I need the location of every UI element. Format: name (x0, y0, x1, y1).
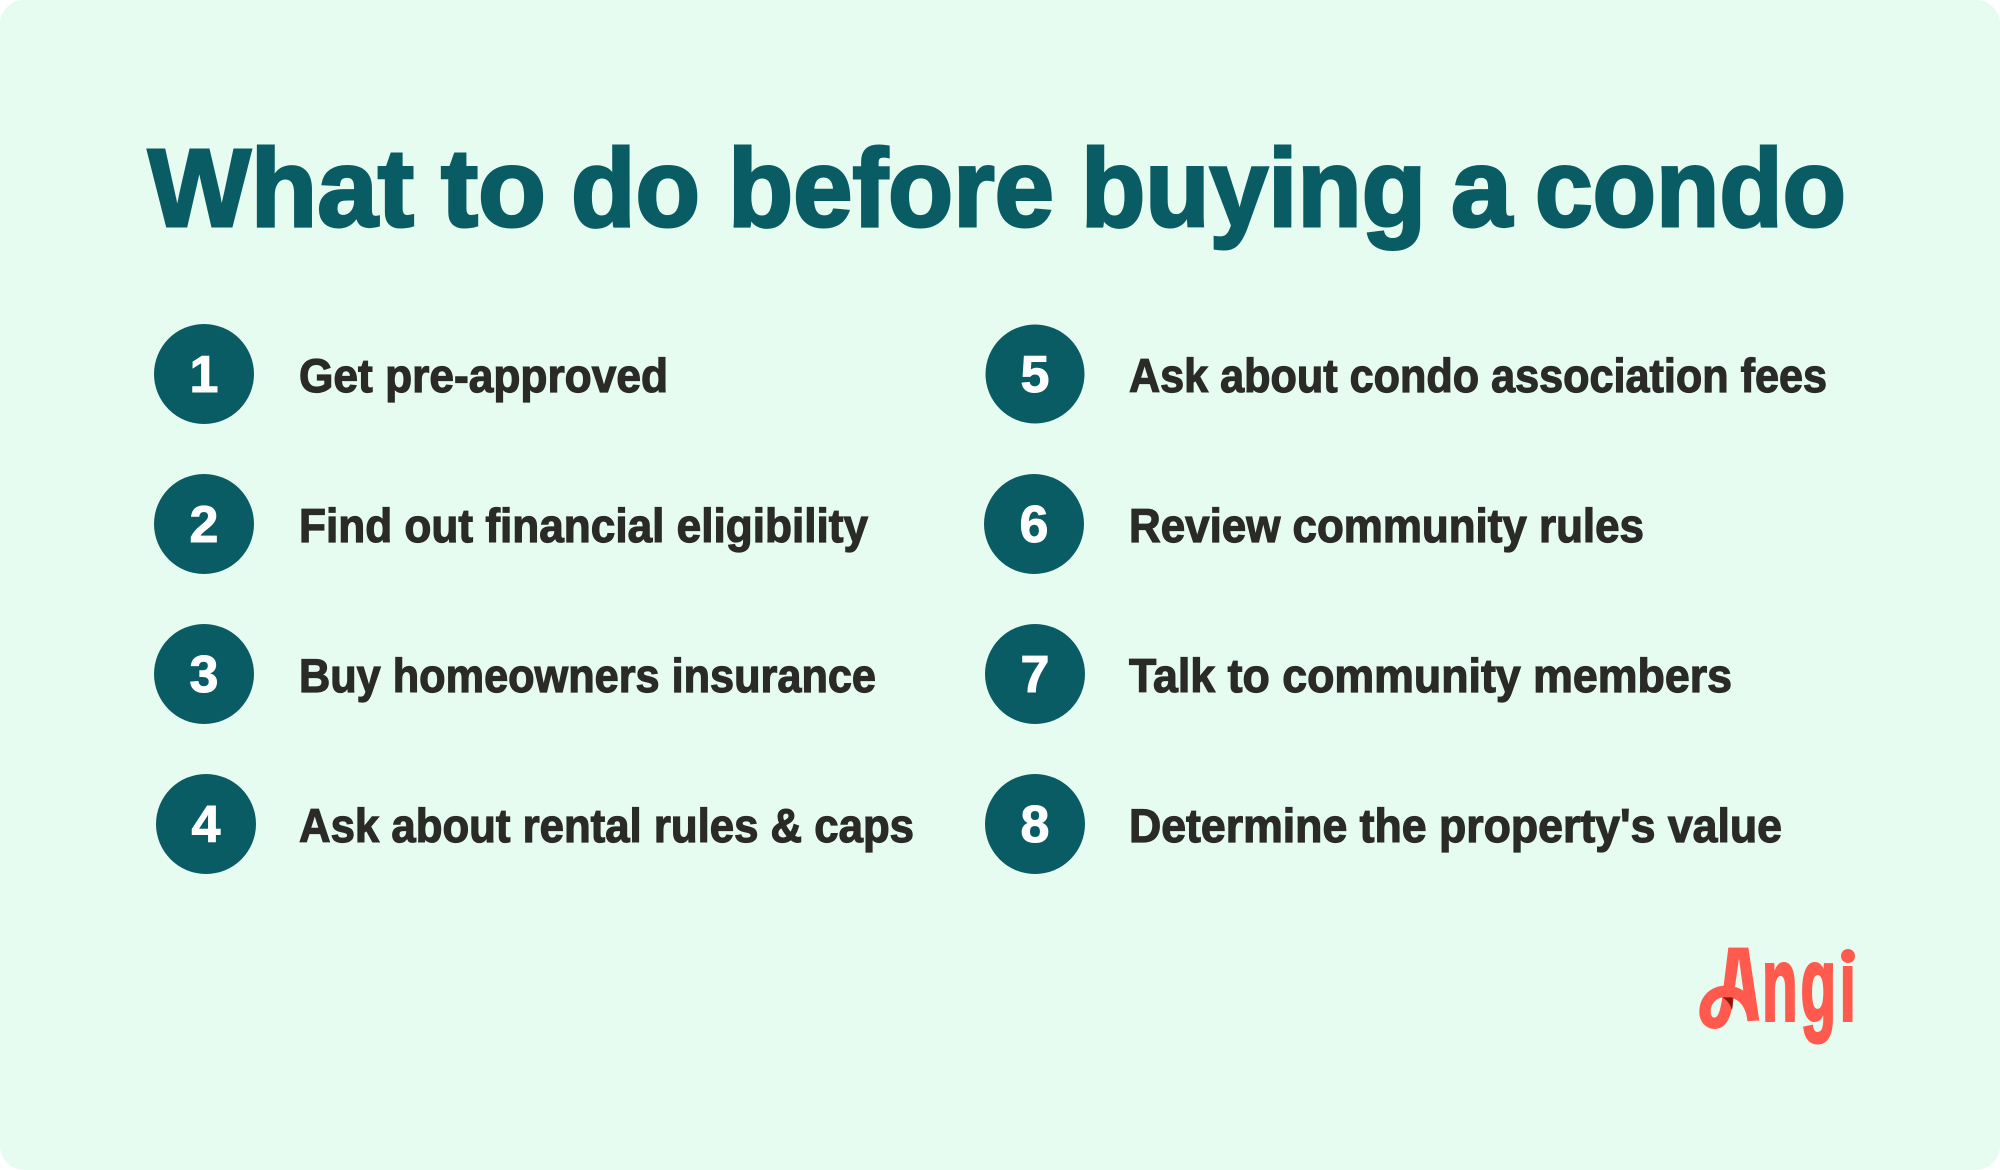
step 4 (156, 774, 914, 874)
step 1: Get pre-approved (299, 349, 668, 402)
title: to (441, 127, 546, 250)
title: condo (1535, 127, 1846, 250)
step 8 (985, 774, 1782, 874)
step 4: 4 (192, 796, 221, 854)
title: before (728, 127, 1054, 250)
step 2: Find out financial eligibility (299, 499, 868, 552)
step 7: Talk to community members (1129, 649, 1732, 702)
step 3 (154, 624, 876, 724)
step 5: 5 (1021, 346, 1049, 404)
title: buying (1081, 127, 1426, 250)
title: What (148, 127, 414, 250)
step 1: 1 (190, 346, 218, 404)
step 2: 2 (190, 496, 218, 554)
step 8: 8 (1021, 796, 1049, 854)
step 4: Ask about rental rules & caps (299, 799, 914, 852)
step 3: 3 (190, 646, 218, 704)
step 8: Determine the property's value (1129, 799, 1782, 852)
step 3: Buy homeowners insurance (299, 649, 876, 702)
step 6: 6 (1020, 496, 1048, 554)
step 5 (986, 324, 1827, 424)
title: a (1451, 127, 1513, 250)
step 2 (154, 474, 868, 574)
step 5: Ask about condo association fees (1129, 349, 1827, 402)
title: do (571, 127, 700, 250)
step 1 (154, 324, 668, 424)
step 6 (984, 474, 1644, 574)
step 7 (985, 624, 1732, 724)
title (148, 127, 1846, 250)
step 7: 7 (1021, 646, 1049, 704)
step 6: Review community rules (1129, 499, 1644, 552)
